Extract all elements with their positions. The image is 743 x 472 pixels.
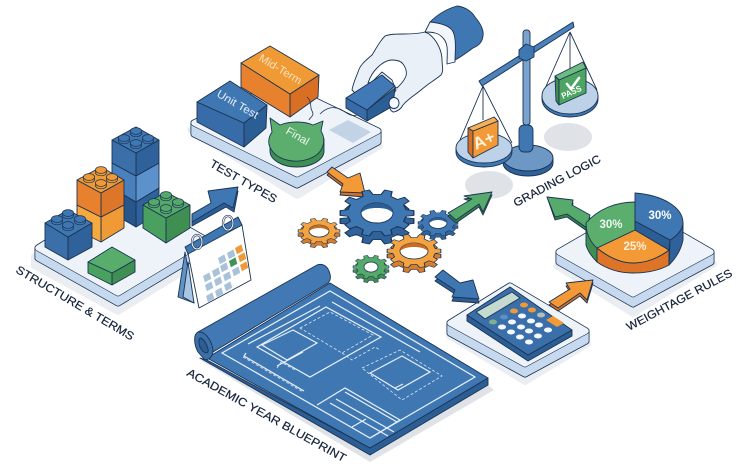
gear: large blue [340,190,414,244]
pie chart [586,193,683,273]
blueprint sheet [195,264,488,455]
box: unit test [197,81,267,147]
pie chart: 30% [599,219,623,231]
panel: central gears [298,190,492,283]
label: test types: TEST TYPES [208,158,279,206]
gear: medium orange [387,234,441,273]
pie: blue inner face [635,221,670,250]
connector: dashed insertion path [307,97,357,120]
calculator screen [476,292,520,319]
glove [352,32,443,112]
platform: structure [34,193,206,312]
green stud brick [143,192,190,243]
arrow: gears to calculator [435,270,479,303]
panel: structure and terms [13,127,251,343]
pie chart: 25% [623,241,647,253]
left pan with A+ grade [456,86,512,167]
thumb [389,98,399,108]
arrow: structure to calendar [192,187,238,226]
empty slot [329,120,371,143]
label: weightage rules: WEIGHTAGE RULES [625,267,735,334]
panel: grading logic scale [456,22,603,210]
blueprint drawings [222,291,475,438]
held block [367,88,395,121]
tall blue brick stack [112,127,159,227]
blueprint shadow [192,355,494,462]
label: structure and terms: STRUCTURE & TERMS [13,264,136,343]
pie: green slice [586,202,635,248]
token: final [269,118,324,167]
right pan with pass badge [542,32,598,117]
pie: blue slice [635,193,683,240]
box: unit test: Unit Test [214,88,260,122]
gear: small blue right [418,210,458,240]
gear: small green [353,255,389,283]
sleeve [430,6,483,60]
arrow: calculator to pie [549,280,593,311]
panel: academic year blueprint [185,264,494,465]
calculator keys [489,302,564,344]
panel: weightage rules [547,193,735,334]
label: academic year blueprint: ACADEMIC YEAR BLUEPRINT [185,367,348,465]
flat green tile [88,247,135,285]
arrow: gears to grading [448,192,492,223]
token: final: Final [284,125,311,148]
arrow: pie to grading [547,197,590,231]
left pan with A+ grade: A+ [470,127,498,154]
pie: orange side [597,248,669,273]
small blue brick [45,210,92,260]
box: mid-term [241,46,319,117]
pie: green side [586,223,597,262]
orange brick stack [77,167,124,242]
gear: small orange left [298,218,340,248]
platform: calculator [449,286,588,382]
pie chart: 30% [648,210,672,222]
platform: test types [190,84,380,196]
right pan with pass badge: PASS [560,83,583,101]
calculator body [467,287,572,361]
panel: calculator [435,270,593,382]
label: grading logic: GRADING LOGIC [512,154,603,210]
cuff [425,22,455,64]
box: mid-term: Mid-Term [256,52,304,87]
pie: blue outer side [669,223,683,265]
shadow spots [465,123,592,199]
arrow: test types to gears [327,167,365,197]
scale base [503,30,553,176]
pie: orange slice [597,230,669,263]
platform: weightage [556,208,714,314]
beam [479,22,574,86]
hand placing block [346,6,483,121]
icon: desk calendar [178,216,251,308]
panel: test types [190,6,483,206]
